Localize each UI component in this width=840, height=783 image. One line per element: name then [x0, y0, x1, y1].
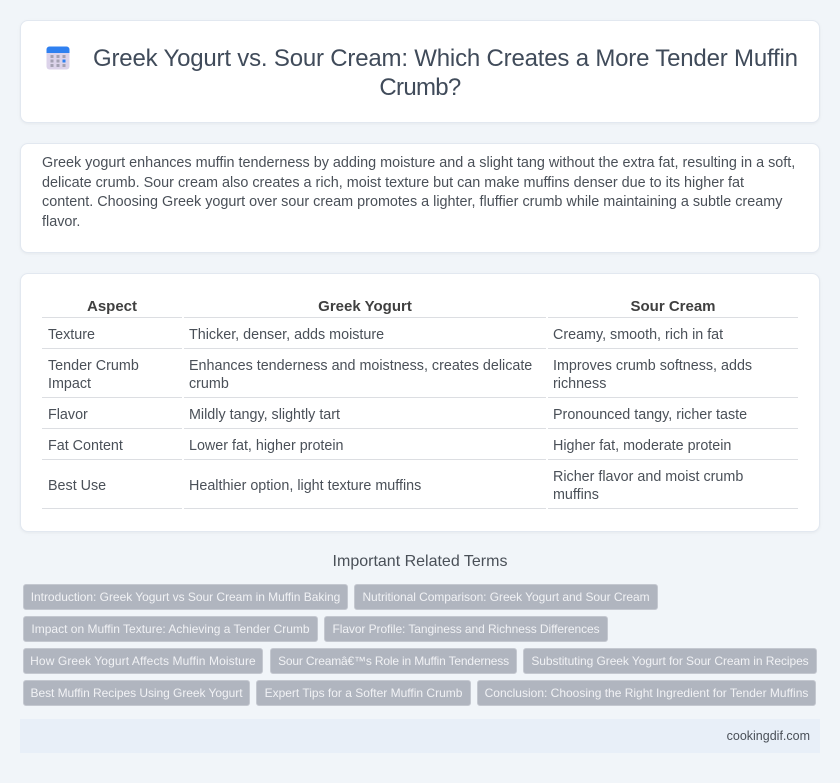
row: flavor: Flavor	[48, 407, 88, 423]
row: best use: Best Use	[48, 478, 106, 494]
tag: Substituting Greek Yogurt for Sour Cream in Recipes	[531, 654, 809, 668]
tag	[523, 648, 817, 674]
tag	[23, 648, 263, 674]
row: texture	[48, 327, 723, 343]
tag: Flavor Profile: Tanginess and Richness Differences	[332, 622, 600, 636]
panel: introduction	[20, 143, 820, 253]
row: fat content: Higher fat, moderate protein	[553, 438, 731, 454]
row: tender crumb impact	[48, 358, 752, 392]
header: sour cream: Sour Cream	[630, 298, 716, 315]
row: best use	[48, 469, 743, 503]
heading: important related terms: Important Related Terms	[333, 553, 507, 570]
row: flavor	[48, 407, 747, 423]
text block: introduction: delicate crumb. Sour cream also creates a rich, moist texture but can make muffins denser due to its higher fat	[42, 174, 744, 190]
text block: introduction	[42, 155, 795, 230]
text block: introduction: content. Choosing Greek yogurt over sour cream promotes a lighter, fluffier crumb while maintaining a subtle creamy	[42, 194, 782, 210]
tag	[324, 616, 608, 642]
tag: Introduction: Greek Yogurt vs Sour Cream in Muffin Baking	[31, 590, 340, 604]
row: fat content	[48, 438, 731, 454]
row: flavor: Mildly tangy, slightly tart	[189, 407, 340, 423]
panel: comparison table	[20, 273, 820, 532]
row: best use: muffins	[553, 487, 599, 503]
row: tender crumb impact: Enhances tenderness and moistness, creates delicate	[189, 358, 532, 374]
footer source text: cookingdif.com	[727, 729, 810, 743]
panel: header card	[20, 20, 820, 123]
table: comparison	[42, 298, 798, 509]
tag: Expert Tips for a Softer Muffin Crumb	[265, 686, 462, 700]
tag: Impact on Muffin Texture: Achieving a Tender Crumb	[31, 622, 310, 636]
icon: calendar	[46, 46, 70, 70]
tag	[477, 680, 816, 706]
footer	[20, 719, 820, 753]
tag group: related terms	[23, 584, 817, 706]
tag	[23, 584, 348, 610]
tag: How Greek Yogurt Affects Muffin Moisture	[30, 654, 256, 668]
row: texture: Creamy, smooth, rich in fat	[553, 327, 723, 343]
header: greek yogurt: Greek Yogurt	[318, 298, 412, 315]
row: tender crumb impact: crumb	[189, 376, 229, 392]
title	[93, 45, 798, 101]
tag: Nutritional Comparison: Greek Yogurt and Sour Cream	[362, 590, 650, 604]
title: Greek Yogurt vs. Sour Cream: Which Creates a More Tender Muffin	[93, 45, 798, 72]
tag	[23, 680, 250, 706]
title: Crumb?	[379, 74, 461, 101]
header: aspect: Aspect	[87, 298, 137, 315]
tag: Conclusion: Choosing the Right Ingredient for Tender Muffins	[485, 686, 808, 700]
tag	[23, 616, 318, 642]
row: tender crumb impact: Improves crumb softness, adds	[553, 358, 752, 374]
row: fat content: Lower fat, higher protein	[189, 438, 344, 454]
row: best use: Healthier option, light texture muffins	[189, 478, 421, 494]
tag	[270, 648, 517, 674]
row: tender crumb impact: Tender Crumb	[48, 358, 139, 374]
tag: Best Muffin Recipes Using Greek Yogurt	[30, 686, 242, 700]
text block: introduction: flavor.	[42, 214, 80, 230]
row: flavor: Pronounced tangy, richer taste	[553, 407, 747, 423]
row: best use: Richer flavor and moist crumb	[553, 469, 743, 485]
row: tender crumb impact: Impact	[48, 376, 91, 392]
row: texture: Thicker, denser, adds moisture	[189, 327, 384, 343]
tag	[354, 584, 658, 610]
row: tender crumb impact: richness	[553, 376, 606, 392]
row: texture: Texture	[48, 327, 95, 343]
tag: Sour Creamâ€™s Role in Muffin Tenderness	[278, 654, 509, 668]
text block: introduction: Greek yogurt enhances muffin tenderness by adding moisture and a slight tang without the extra fat, resulting in a soft,	[42, 155, 795, 171]
row: fat content: Fat Content	[48, 438, 123, 454]
tag	[256, 680, 471, 706]
